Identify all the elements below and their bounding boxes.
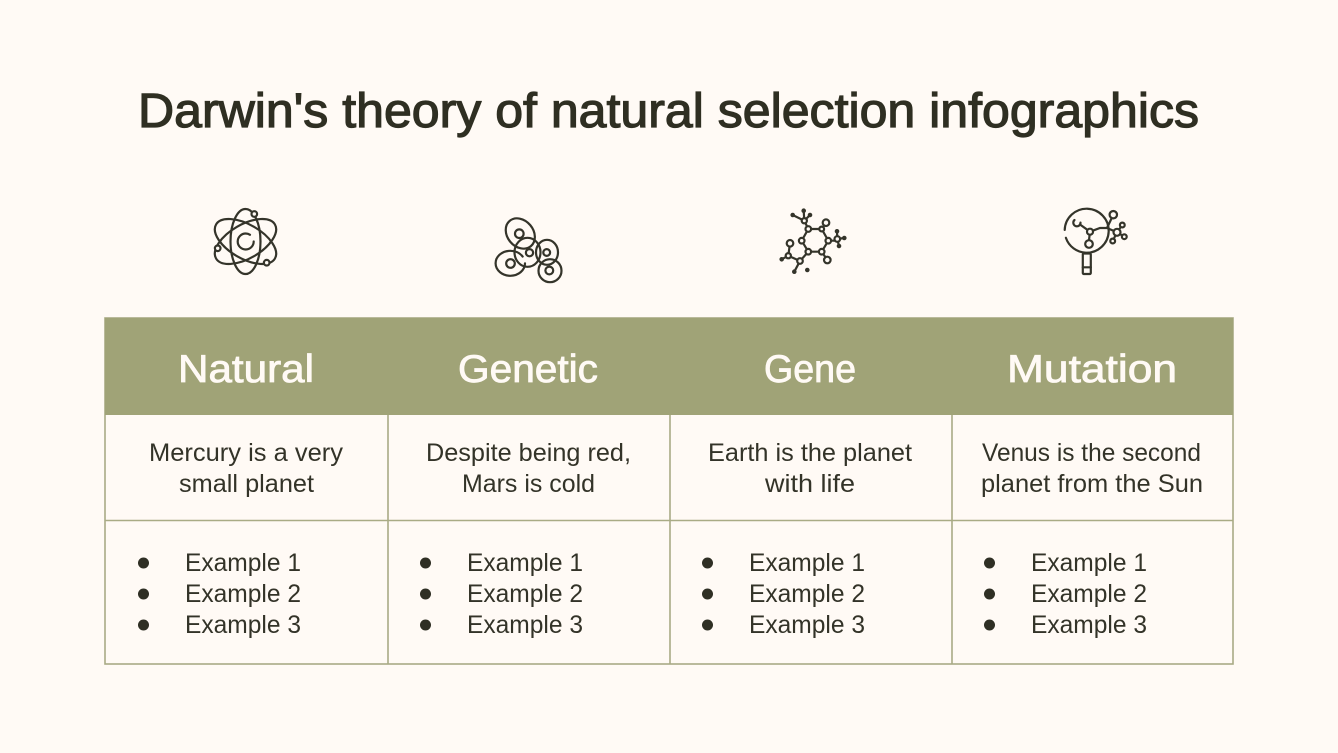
table — [105, 318, 1233, 664]
column headers: Genetic — [458, 348, 598, 391]
example lists: Example 3 — [749, 611, 865, 639]
column headers — [105, 318, 1233, 415]
example lists: Example 1 — [467, 549, 583, 577]
title: Darwin's theory of natural selection infographics — [138, 85, 1199, 138]
example lists: Example 3 — [1031, 611, 1147, 639]
descriptions: Earth is the planet — [708, 439, 912, 467]
example lists: Example 1 — [185, 549, 301, 577]
descriptions: Venus is the second — [982, 439, 1201, 467]
column headers: Natural — [178, 348, 314, 391]
descriptions — [149, 439, 1203, 498]
icon: magnifier with molecule — [1064, 208, 1127, 274]
example lists — [138, 549, 1147, 639]
column headers: Gene — [764, 348, 856, 391]
descriptions: Mars is cold — [462, 470, 595, 498]
descriptions: planet from the Sun — [981, 470, 1203, 498]
icon: cells — [496, 213, 562, 282]
icon: molecule — [780, 210, 846, 273]
example lists: Example 2 — [185, 580, 301, 608]
example lists: Example 3 — [467, 611, 583, 639]
descriptions: small planet — [179, 470, 314, 498]
table grid — [105, 318, 1233, 664]
example lists: Example 1 — [749, 549, 865, 577]
example lists: Example 2 — [467, 580, 583, 608]
example lists: Example 2 — [1031, 580, 1147, 608]
descriptions: Mercury is a very — [149, 439, 344, 467]
example lists: Example 2 — [749, 580, 865, 608]
descriptions: with life — [764, 470, 855, 498]
example lists: Example 3 — [185, 611, 301, 639]
icon: atom — [208, 209, 283, 274]
example lists: Example 1 — [1031, 549, 1147, 577]
column headers: Mutation — [1007, 348, 1177, 391]
descriptions: Despite being red, — [426, 439, 631, 467]
